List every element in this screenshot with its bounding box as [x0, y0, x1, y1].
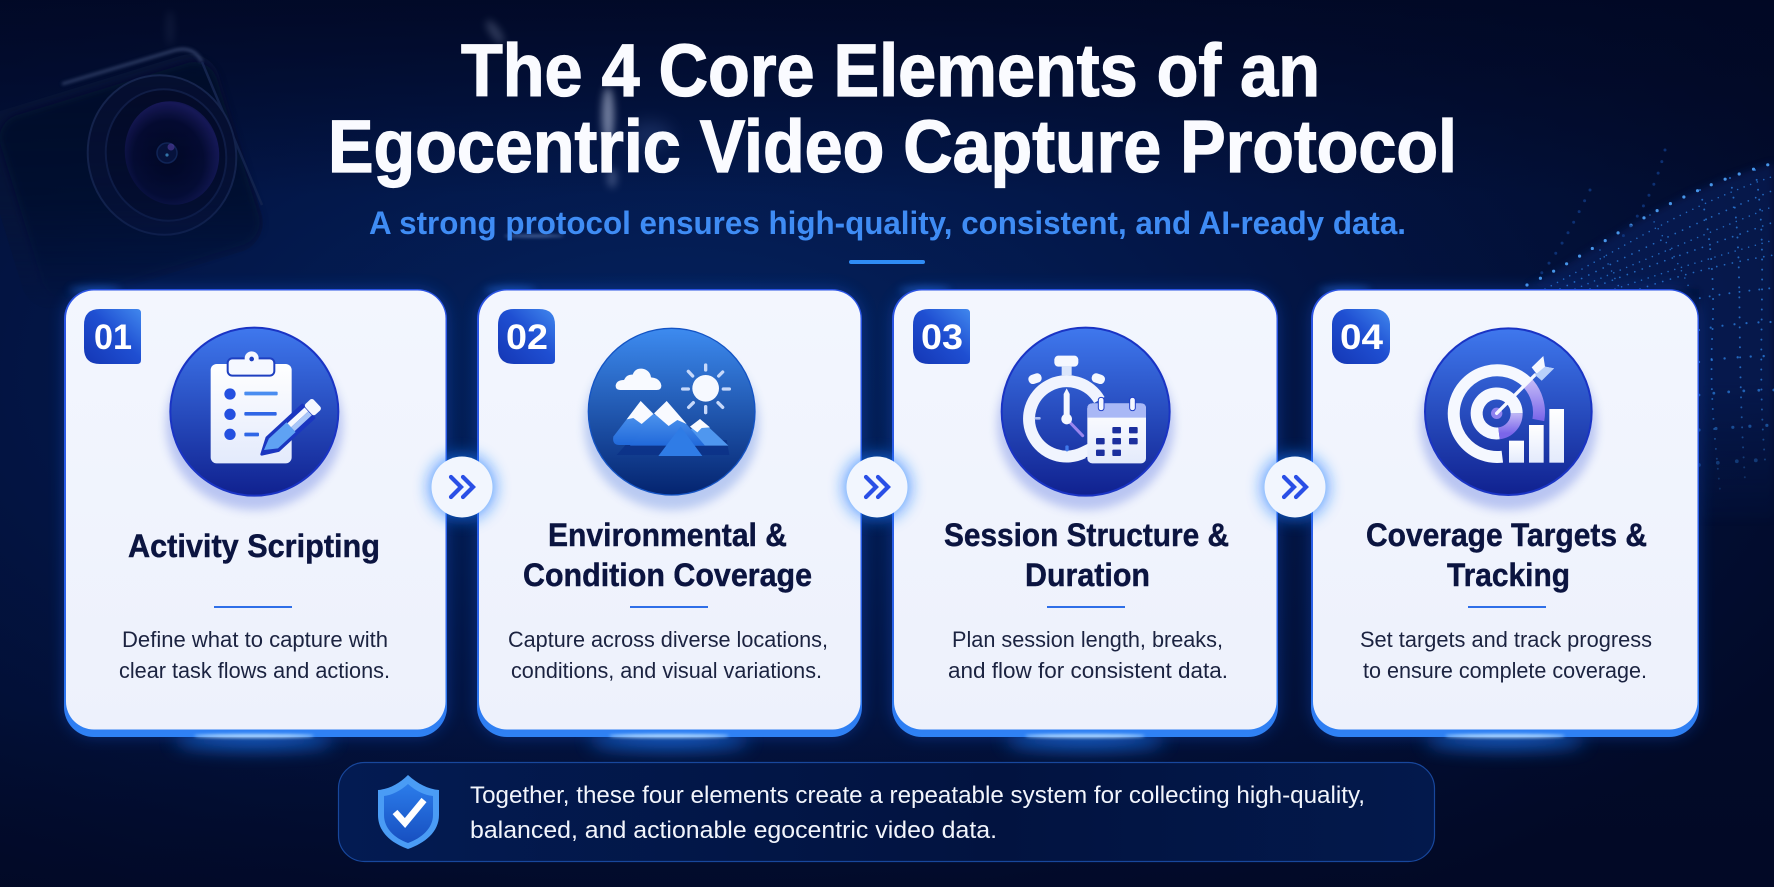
card heading: [944, 517, 1229, 593]
arrow: card 3 to card 4: [1262, 454, 1328, 520]
card heading: Coverage Targets &: [1366, 517, 1647, 553]
panel: card 2 environmental and condition coverage: [477, 287, 862, 749]
card heading: Activity Scripting: [128, 528, 380, 564]
badge 02: 02: [506, 318, 548, 357]
callout text: Together, these four elements create a repeatable system for collecting high-quality,: [470, 782, 1365, 809]
card divider: [214, 606, 292, 608]
title: The 4 Core Elements of an: [461, 29, 1320, 112]
card divider: [1047, 606, 1125, 608]
card description: Capture across diverse locations,: [508, 627, 828, 652]
panel: card 3 session structure and duration: [892, 287, 1278, 749]
callout: summary: [338, 762, 1434, 862]
icon: mountains, cloud and sun: [584, 328, 759, 510]
sparkle lights: [166, 10, 672, 238]
data mesh: [1527, 150, 1774, 520]
heading divider: [849, 260, 925, 264]
badge 01: [84, 309, 141, 364]
icon: shield with check: [378, 775, 439, 849]
card description: Define what to capture with: [122, 627, 388, 652]
card description: to ensure complete coverage.: [1363, 658, 1647, 683]
card heading: [523, 517, 812, 593]
card divider: [630, 606, 708, 608]
card description: [119, 627, 390, 683]
badge 03: [913, 309, 970, 364]
card heading: [1366, 517, 1647, 593]
badge 04: [1332, 309, 1390, 364]
title: Egocentric Video Capture Protocol: [328, 105, 1457, 188]
icon: target with arrow and bars: [1420, 328, 1597, 510]
panel: card 1 activity scripting: [64, 287, 447, 749]
badge 02: [498, 309, 555, 364]
card description: Set targets and track progress: [1360, 627, 1652, 652]
card description: Plan session length, breaks,: [952, 627, 1223, 652]
card description: [1360, 627, 1652, 683]
title: [328, 29, 1457, 188]
camera illustration: [2, 46, 263, 276]
arrow: card 2 to card 3: [844, 454, 910, 520]
badge 01: 01: [94, 318, 132, 357]
card description: and flow for consistent data.: [948, 658, 1228, 683]
card description: [948, 627, 1228, 683]
icon: stopwatch and calendar: [997, 328, 1174, 510]
icon: clipboard with pencil: [166, 328, 343, 510]
callout text: [470, 782, 1365, 844]
card description: clear task flows and actions.: [119, 658, 390, 683]
card heading: Tracking: [1447, 557, 1570, 593]
badge 04: 04: [1340, 318, 1384, 357]
card divider: [1468, 606, 1546, 608]
callout text: balanced, and actionable egocentric video data.: [470, 817, 997, 844]
card heading: Condition Coverage: [523, 557, 812, 593]
badge 03: 03: [921, 318, 963, 357]
card description: conditions, and visual variations.: [511, 658, 822, 683]
card heading: Environmental &: [548, 517, 787, 553]
card heading: Duration: [1025, 557, 1150, 593]
card description: [508, 627, 828, 683]
subtitle: A strong protocol ensures high-quality, consistent, and AI-ready data.: [369, 205, 1406, 241]
card heading: Session Structure &: [944, 517, 1229, 553]
panel: card 4 coverage targets and tracking: [1311, 287, 1699, 749]
arrow: card 1 to card 2: [429, 454, 495, 520]
